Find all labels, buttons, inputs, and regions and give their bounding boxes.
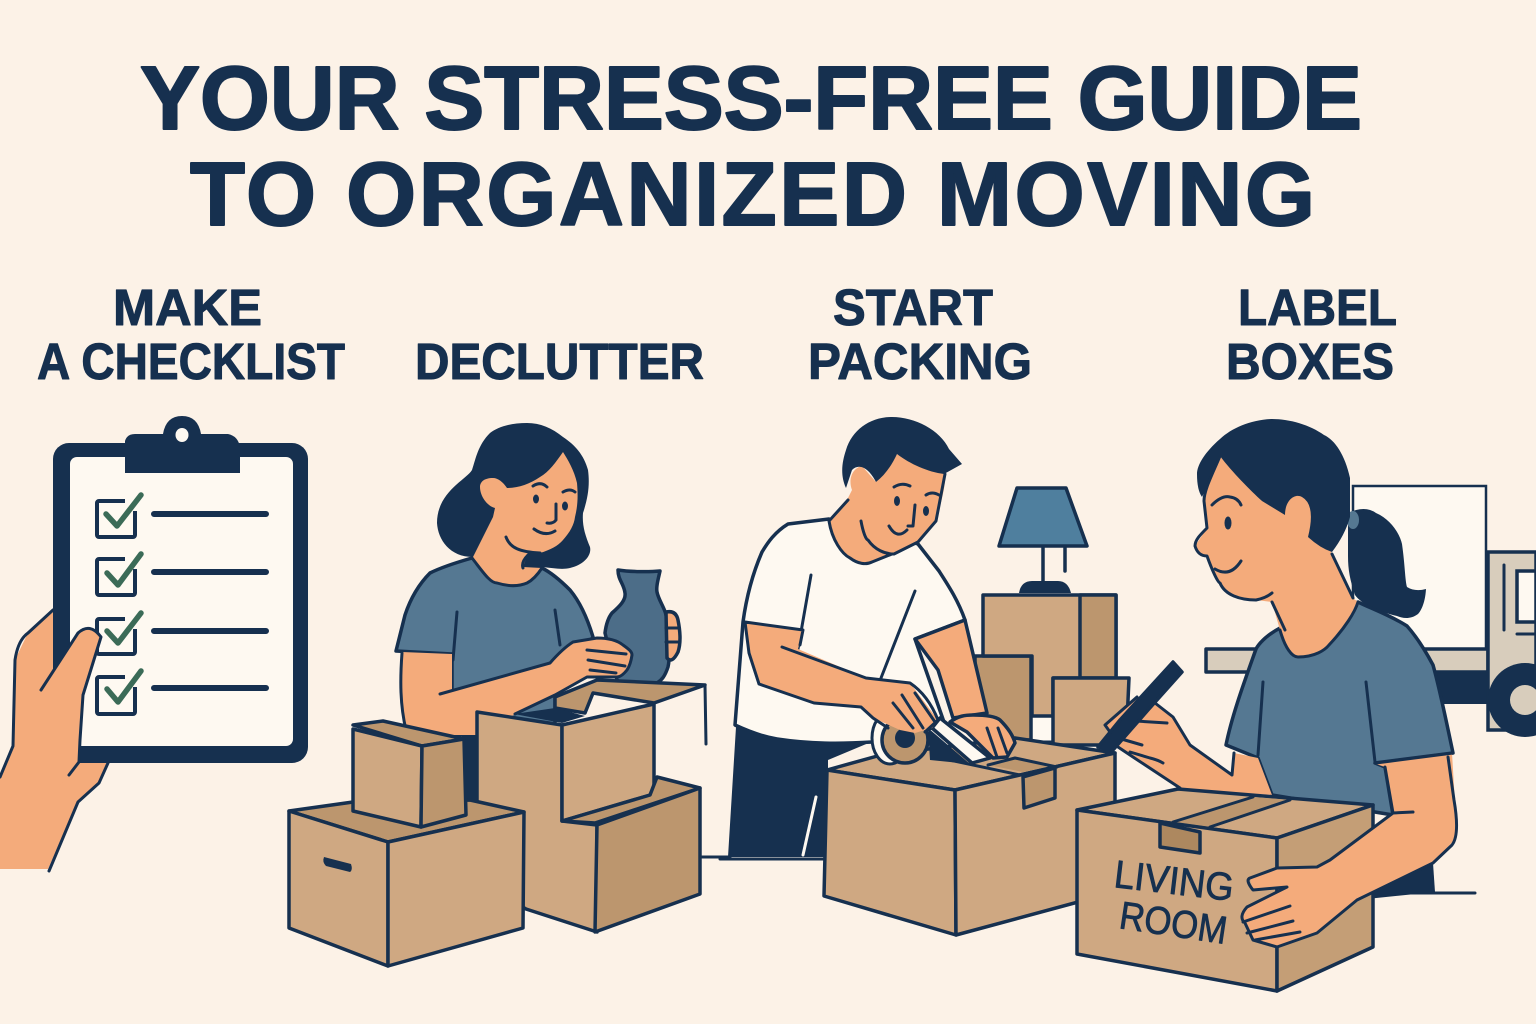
step label: declutter: DECLUTTER [415, 333, 704, 390]
step label: start packing: START [833, 279, 993, 336]
face details [533, 484, 575, 534]
title: TO ORGANIZED MOVING [190, 145, 1315, 245]
title: YOUR STRESS-FREE GUIDE [140, 49, 1362, 149]
shirt [396, 558, 593, 735]
truck in background [1206, 486, 1536, 737]
left arm [746, 622, 938, 733]
right arm [915, 620, 987, 718]
arm holding pen [1105, 697, 1272, 795]
lamp and stacked boxes [975, 488, 1129, 745]
person: declutter [396, 423, 680, 735]
palm behind clipboard [0, 610, 110, 869]
title [140, 49, 1362, 245]
small top box [353, 721, 464, 746]
hand and thumb over clipboard [0, 610, 101, 800]
box label text [1112, 853, 1236, 953]
boxes: declutter stack [289, 680, 730, 966]
pen [1098, 662, 1182, 750]
far hand on vase [666, 612, 680, 660]
step label: label boxes: BOXES [1226, 333, 1394, 390]
vase [605, 570, 669, 688]
box being taped [824, 738, 1115, 935]
step label: make a checklist: MAKE [113, 279, 262, 336]
checklist rows [97, 495, 266, 714]
box label text: LIVING [1112, 853, 1236, 910]
labelled box: living room [1077, 789, 1373, 991]
hair [437, 423, 590, 569]
person: start packing [720, 417, 965, 859]
step label: label boxes [1226, 279, 1397, 390]
neck and head [829, 454, 945, 564]
trousers and floor line [1357, 863, 1435, 900]
arms and tape gun [745, 620, 1015, 764]
box label text: ROOM [1117, 894, 1230, 953]
step label: make a checklist [37, 279, 345, 390]
ponytail [1348, 509, 1426, 618]
arm with hand [401, 638, 632, 735]
white t-shirt [735, 519, 965, 743]
open box flap [555, 680, 705, 713]
tape gun [872, 712, 908, 764]
step label: start packing: PACKING [808, 333, 1032, 390]
bottom box with handle [289, 800, 524, 842]
right hand [950, 715, 1015, 758]
face details [1212, 497, 1241, 572]
tall open box [477, 712, 597, 932]
clipboard [53, 416, 308, 763]
icon: hand and clipboard checklist [0, 416, 308, 871]
arm and hand holding box [1242, 753, 1457, 947]
neck and face [1195, 456, 1358, 657]
face details [889, 484, 939, 534]
step label: start packing [808, 279, 1032, 390]
neck and face [473, 452, 578, 586]
step label: make a checklist: A CHECKLIST [37, 333, 345, 390]
trousers [728, 727, 871, 857]
shirt [1226, 602, 1453, 815]
person: label boxes [1098, 419, 1475, 900]
step label: label boxes: LABEL [1238, 279, 1397, 336]
